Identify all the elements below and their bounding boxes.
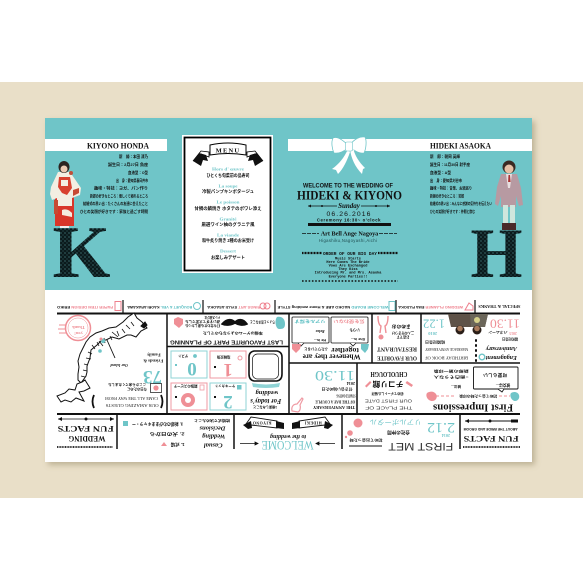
- box: pink number 1: [210, 351, 246, 380]
- text block: menu courses: Le poisson: [216, 200, 240, 204]
- heading: welcome line: WELCOME TO THE WEDDING OF: [303, 182, 393, 190]
- text block: groom details: 血液型：A型: [430, 169, 451, 175]
- text: 新郎の第一印象: [433, 369, 469, 374]
- text block: order of the day: [315, 256, 382, 280]
- text: venue: [302, 230, 397, 238]
- text: order of the day heading: [302, 251, 398, 257]
- photo: groom as a boy: [495, 160, 523, 230]
- icon: wine glass: [378, 316, 388, 333]
- text block: menu courses: お楽しみデザート: [211, 254, 245, 261]
- box: teal number 0: [171, 351, 207, 379]
- cell: least favourite part: [170, 316, 285, 412]
- label: friends and family: [143, 352, 163, 364]
- heading: groom name: HIDEKI ASAOKA: [430, 140, 492, 150]
- text block: OF THE DAY A COUPLE: [315, 400, 355, 404]
- cell: first date: [365, 370, 413, 410]
- small flag text: ここから来てくれました: [108, 382, 146, 388]
- text block: menu courses: La soupe: [218, 184, 238, 188]
- heading: whenever they are together: Whenever they are: [302, 352, 361, 362]
- text: [433, 369, 469, 390]
- text: for todays wedding: 1番楽しみなこと: [253, 405, 277, 410]
- text block: menu courses: Dessert: [220, 248, 237, 254]
- heading: first met: FIRST MET: [388, 440, 453, 452]
- stamp: you!: [74, 331, 83, 336]
- label: our island: Our Island: [110, 363, 128, 367]
- cell: restaurant: [377, 316, 417, 360]
- label: friends and family: Family: [146, 352, 161, 358]
- text: 彼は...: [451, 384, 461, 390]
- icon: pink balloon: [292, 398, 303, 412]
- text block: bride details: 血液型：O型: [128, 169, 148, 175]
- heading: bride name: KIYONO HONDA: [87, 140, 150, 150]
- arrow: [465, 419, 518, 423]
- cell: guests map: [57, 313, 163, 408]
- zigzag: [57, 446, 113, 448]
- text block: bride details: 新 婦：本田 清乃: [119, 153, 148, 159]
- small text: ドレス選びは: [204, 316, 220, 320]
- icon: teal drop: [361, 344, 369, 353]
- number: 2.12: 2.12: [427, 419, 455, 435]
- small text: お店です: [397, 335, 409, 340]
- text block: bride details: ひとの笑顔が好きです：家族と過ごす時間: [80, 208, 148, 214]
- speech bubble: he: いつも: [349, 328, 360, 333]
- small text: 準備はゲームのようなものでした: [202, 331, 263, 336]
- text block: groom details: 結婚式の思い出：みんなに感謝の気持ちを伝えたい: [430, 200, 492, 206]
- ribbon bar: centre and groom: [288, 139, 532, 151]
- arrow: [58, 417, 114, 421]
- box: pink number 3: 親族のスピーチ: [173, 384, 197, 389]
- strip: credits: RINGS ART SYUJI ASAOKA: [207, 305, 260, 309]
- text: venue: Art Bell Ange Nagoya: [321, 230, 378, 238]
- box: pink number 1: 指輪交換: [216, 355, 230, 360]
- speech bubble: 彼女は...: [496, 383, 510, 388]
- year: 2014: [441, 433, 450, 438]
- text block: [313, 387, 356, 410]
- text: engagement anniversary: 婚約記念日: [502, 337, 518, 342]
- icon: mustache: [222, 320, 247, 325]
- dotted line: [302, 280, 398, 282]
- cell: right fun facts: [463, 419, 520, 447]
- heading: whenever they are together: ふたりでいると: [304, 347, 328, 352]
- small text: ちょっと苦手なこと: [250, 320, 275, 325]
- arrows: [240, 442, 335, 445]
- heading: fun facts: FUN FACTS: [463, 434, 519, 443]
- icons: blobs: [426, 392, 519, 401]
- heading: RESTAURANT: [377, 346, 417, 352]
- strip: credits: SPECIAL & THANKS: [478, 304, 520, 309]
- cell: whenever they are together: [292, 317, 369, 362]
- text: engagement anniversary: [485, 337, 518, 360]
- icon: pink heart: [378, 334, 384, 340]
- script heading: Casual: [204, 442, 223, 448]
- script heading: Decisions: [199, 424, 226, 432]
- box: teal number 0: ゲスト: [178, 354, 188, 359]
- text: restaurant name: まめのお: [391, 323, 411, 330]
- teal place name: リアルポータル: [369, 418, 422, 427]
- strip: credits: WELCOME BOARD NAOKO ABE & Home wedding STYLE: [277, 305, 388, 309]
- text block: menu courses: La viande: [217, 232, 239, 238]
- strip: credits: BOUQUET & VEIL KAORI ARAKAWA: [127, 305, 192, 309]
- text block: groom details: ひとの笑顔が好きです：仲間と飲む: [430, 208, 475, 214]
- text block: menu courses: 冷製パンプキンポタージュ: [202, 188, 254, 195]
- text block: order of the day: Introducing Mr. and Mrs. Asaoka: [315, 270, 382, 276]
- box: teal number 2: [210, 383, 246, 412]
- arrow: [349, 445, 382, 447]
- speech bubble: she: リアルを探す: [294, 319, 326, 325]
- text: date: 06.26.2016: [326, 211, 372, 218]
- script heading: Wedding: [201, 432, 225, 440]
- text: the place of our first date: OUR FIRST DATE: [365, 398, 412, 404]
- photo: couple upside down: [448, 314, 488, 334]
- text: the place of our first date: [365, 398, 412, 410]
- card: [45, 118, 532, 462]
- background: kraft paper: [0, 82, 583, 498]
- banners: KIYONO: [252, 420, 272, 426]
- year teal: 2010: [428, 331, 437, 336]
- cell: first impressions: [426, 367, 519, 412]
- text: for todays wedding: For today's: [250, 397, 281, 405]
- text: order of the day heading: ORDER OF OUR BIG DAY: [323, 251, 377, 257]
- panel: bride profile: [45, 139, 167, 294]
- ribbon bar: bride name: [45, 139, 167, 151]
- box: pink number 1: 1: [223, 359, 233, 380]
- text block: menu courses: 厳選ワイン柚のグラニテ風: [202, 221, 255, 228]
- text: guests came from: CAME ALL THE WAY FROM: [105, 396, 158, 401]
- list: 2. 犬の日から: [150, 430, 184, 438]
- script text: to the wedding: [270, 433, 306, 439]
- small text: 打ち合わせも楽しかった: [184, 324, 220, 328]
- text: ○面白そうな人: [433, 375, 469, 380]
- small text: [184, 316, 275, 336]
- text block: groom details: 出 身：愛知県刈谷市: [430, 177, 462, 183]
- text block: groom details: 新婦の好きなところ：笑顔: [430, 192, 464, 198]
- speech bubble: she: Relax: [315, 329, 325, 333]
- heading: welcome: WELCOME: [261, 438, 314, 453]
- text: [424, 340, 468, 360]
- text block: order of the day: Everyone Parties!!: [329, 274, 367, 280]
- speech bubble: he: She is...: [351, 337, 365, 341]
- text block: menu courses: ひとくち旬菜前の島寿司: [206, 172, 250, 179]
- pointer: our island: [107, 340, 115, 358]
- heading: first impressions: First Impressions: [433, 402, 513, 412]
- box: teal number 0: 0: [187, 358, 197, 379]
- icons: pink ribbons: [365, 381, 413, 388]
- number: 11.30 pink: 11.30: [490, 316, 520, 332]
- monogram: K: K: [52, 212, 110, 294]
- text: guests came from: OUR AMAZING GUESTS: [105, 403, 159, 408]
- date divider: Sunday: Sunday: [338, 202, 361, 210]
- text: BIRTHDAY BOOK OF: [425, 356, 468, 360]
- divider bar: [308, 223, 391, 226]
- menu frame: [182, 135, 273, 273]
- number: 1.22: 1.22: [423, 316, 445, 332]
- cell: first met: [345, 418, 455, 452]
- heading: OUR FAVORITE: [377, 354, 417, 360]
- icon: teal blob: [276, 317, 285, 329]
- text: for todays wedding: wedding: [255, 389, 278, 396]
- icon: pink mark: [161, 442, 167, 446]
- text block: order of the day: Here Comes The Bride: [326, 260, 370, 265]
- strip: credits: PAPER ITEM DESIGN ERIKO: [57, 305, 113, 309]
- heading: last favourite part: LAST FAVOURITE PART OF PLANNING: [170, 338, 283, 344]
- cell: wedding fun facts: [57, 417, 114, 447]
- icons: pink dots: [345, 418, 362, 438]
- text: MARRIAGE ANNIVERSARY: [424, 347, 468, 352]
- year pink: 2015: [509, 331, 517, 335]
- small text: 初めて出会った時: [348, 438, 383, 443]
- text: for todays wedding: [250, 389, 281, 410]
- ornament frame: [249, 351, 282, 388]
- text block: 付き合い始めた日: [322, 387, 352, 392]
- list: 3. 新郎のわがままキャラ・ー: [132, 420, 183, 428]
- map highlights: [98, 338, 105, 353]
- text: fun facts: FUN FACTS: [57, 424, 114, 433]
- cell: photo and dates: [423, 314, 520, 361]
- text: ceremony time: Ceremony 16:30~ o'clock: [317, 218, 381, 222]
- speech bubble: he: [331, 317, 368, 346]
- speech bubble: he: 気を使わない: [334, 319, 364, 325]
- speech bubble: she: [292, 317, 329, 346]
- heading: [377, 346, 417, 360]
- panel: groom profile: [430, 140, 523, 293]
- strip: credits: WEDDING PLANNER EMA FUJIOKA: [398, 305, 463, 309]
- small text: 二人の行きつけ: [392, 331, 414, 336]
- icon: white bow: [332, 137, 366, 174]
- box: teal number 2: ケーキカット: [215, 384, 235, 389]
- script heading: [199, 424, 226, 448]
- text: guests came from: [92, 395, 162, 408]
- strip: credits: [57, 304, 520, 309]
- text block: groom details: [430, 153, 492, 214]
- icon: pink pentagon: [174, 317, 183, 328]
- small text: 初めて会った時の印象: [458, 394, 497, 399]
- text block: bride details: [80, 153, 148, 214]
- panel: menu: [182, 135, 273, 273]
- script date: ハネムーン: [488, 330, 508, 335]
- small text: [392, 331, 414, 340]
- text block: bride details: 出 身：愛知県春日井市: [116, 177, 148, 183]
- small text: 初めてデートした場所: [371, 392, 404, 396]
- text block: menu courses: 甘鯛の鱗焼き ホタテのポワレ添え: [194, 205, 262, 212]
- text block: menu courses: Hors d' œuvre: [212, 166, 244, 172]
- text: engagement anniversary: Anniversary: [485, 345, 518, 351]
- place text: 会社の仲間: [387, 429, 410, 436]
- text block: groom details: 新 郎：朝岡 英輝: [430, 153, 460, 159]
- monogram: H: H: [470, 215, 522, 293]
- cell: anniversary: [292, 367, 356, 412]
- banner: menu: MENU: [216, 148, 240, 154]
- heading: whenever they are together: [302, 346, 361, 362]
- heading: couple names: HIDEKI & KIYONO: [297, 188, 402, 202]
- grid lines: [57, 300, 520, 449]
- text: 結婚記念日: [425, 340, 445, 345]
- stamp: Thank: [72, 325, 85, 330]
- list: [132, 420, 184, 448]
- list: 1. 式場: [170, 441, 184, 448]
- map of Japan: [57, 313, 147, 402]
- cell: casual wedding decisions: [123, 418, 230, 448]
- text block: bride details: 結婚式の思い出：たくさんの友達に会えたこと: [83, 200, 148, 206]
- panel: upside-down fun facts sheet: [57, 300, 520, 453]
- small text: 結婚式で決めたこと: [194, 418, 230, 424]
- dotted divider: [475, 340, 477, 361]
- text block: STARTED DATING: [336, 394, 356, 398]
- date divider: Sunday: [308, 202, 390, 210]
- speech bubble: [474, 367, 518, 392]
- text block: menu courses: [194, 166, 262, 261]
- text block: bride details: 趣味・特技：ヨガ、パン作り: [94, 184, 148, 190]
- text block: order of the day: Music Starts: [335, 256, 361, 262]
- icon: flag: [150, 384, 162, 392]
- box: teal number 2: 2: [223, 391, 233, 412]
- cell: welcome to the wedding: [240, 417, 335, 453]
- label: friends and family: Friends &: [143, 358, 163, 364]
- panel: teal upper half: [45, 118, 532, 290]
- text block: order of the day: Vows Are Exchanged: [329, 263, 367, 268]
- year: 2014: [346, 381, 355, 386]
- small flag text: 今日のために: [127, 387, 147, 392]
- small text: ABOUT THE BRIDE AND GROOM: [464, 427, 518, 431]
- text block: THE ANNIVERSARY: [313, 405, 355, 410]
- banners: HIDEKI: [304, 420, 322, 426]
- number: 11.30 teal: 11.30: [315, 367, 355, 383]
- text block: groom details: 趣味・特技：音楽、お酒巡り: [430, 184, 472, 190]
- icon: pink drop: [292, 344, 301, 353]
- number: 73: 73: [143, 366, 162, 387]
- text block: bride details: 新郎の好きなところ：優しくて頼れるところ: [90, 192, 148, 198]
- text: wedding: WEDDING: [68, 434, 106, 443]
- text block: menu courses: Granité: [220, 216, 236, 222]
- banners: [243, 417, 333, 429]
- speech bubble: 可愛らしい: [483, 372, 507, 378]
- text: venue address: Higashiku,Nagoyashi,Aichi: [319, 238, 377, 243]
- small flag text: [108, 382, 147, 392]
- text: チコリ館: チコリ館: [372, 380, 404, 390]
- panel: centre invitation: [288, 137, 532, 281]
- text block: groom details: 誕生日：11月30日 射手座: [430, 161, 470, 167]
- text block: bride details: 誕生日：2月27日 魚座: [108, 161, 148, 167]
- speech bubble: she: He is...: [314, 338, 326, 342]
- zigzag: [463, 446, 520, 448]
- icon: teal square: [123, 421, 128, 426]
- small text: 迷いすぎて大変でした: [184, 320, 220, 324]
- text: the place of our first date: THE PLACE OF: [365, 406, 412, 410]
- icon: ring: [479, 354, 485, 360]
- text: place name: CHUOLOUGH: [370, 370, 407, 378]
- strip icons: [115, 302, 473, 310]
- text block: order of the day: They Kiss: [338, 267, 358, 272]
- stamp: [58, 316, 90, 340]
- text: engagement anniversary: Engagement: [486, 354, 518, 360]
- text block: menu courses: 和牛炙り焼き 2種のお米受け: [202, 237, 255, 244]
- photo: bride in kimono: [50, 161, 81, 228]
- heading: whenever they are together: together: [331, 346, 359, 354]
